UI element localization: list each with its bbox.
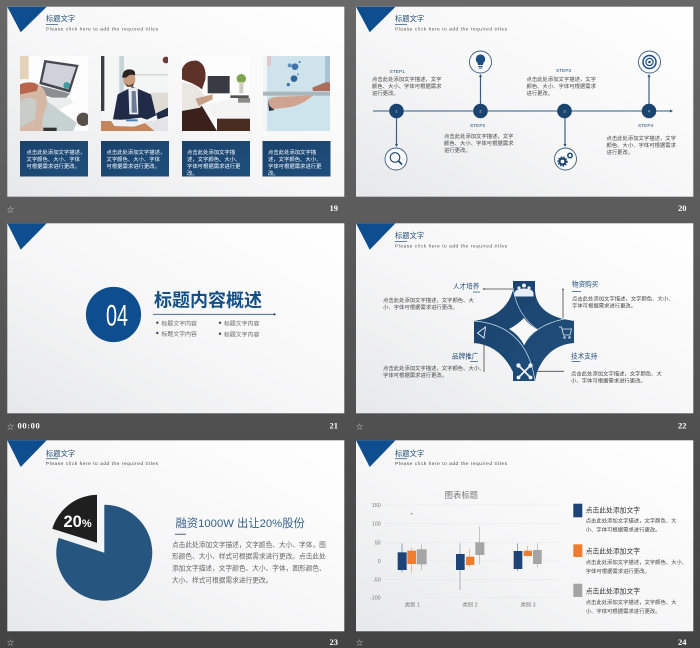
footer 21 [7, 420, 338, 431]
footer 23: ☆ [7, 638, 14, 647]
heading [395, 449, 508, 467]
caption box 2: 文字颜色、大小、字体 [106, 155, 161, 163]
heading: 标题文字 [395, 231, 424, 240]
caption box 3: 点击此处添加文字描 [187, 148, 236, 156]
label: talent [383, 282, 513, 311]
footer 23: 23 [330, 637, 338, 647]
photo: businessman [101, 56, 168, 131]
step 3 text: STEP3 [556, 68, 572, 74]
footer 21: 21 [330, 420, 338, 430]
y axis labels: 50 [375, 540, 381, 546]
icon: shopping cart [559, 327, 572, 338]
y axis labels [370, 503, 381, 602]
step 4 text: STEP4 [638, 123, 654, 129]
panel: slide 19 photos and captions [7, 7, 344, 214]
body paragraph: 形颜色、大小、样式可根据需求进行更改。点击此处 [172, 552, 326, 561]
caption box 4: 字体可根据需求进行更 [268, 162, 322, 170]
legend item blue [573, 504, 677, 534]
caption box 1: 点击此处添加文字描述， [26, 148, 85, 156]
x axis labels: 类别 2 [462, 601, 478, 609]
step 1 text: 颜色、大小、字体可根据需求 [372, 82, 442, 90]
pie label: 20% [64, 513, 92, 531]
heading [395, 14, 508, 32]
financing heading [175, 516, 305, 535]
corner triangle [356, 7, 396, 32]
whiskers [402, 527, 537, 590]
corner triangle [356, 223, 396, 250]
caption box 2 [101, 141, 169, 176]
caption box 4 [262, 141, 330, 177]
boxes category 1 [398, 513, 427, 570]
caption box 3: 字体可根据需求进行更 [187, 162, 241, 170]
corner triangle [356, 440, 396, 467]
heading: 标题文字 [46, 449, 75, 458]
label: brand: 点击此处添加文字描述，文字颜色、大小、 [383, 364, 485, 372]
boxes category 2 [456, 542, 484, 570]
icon: magnifier [385, 148, 407, 170]
step 1 text: 点击此处添加文字描述，文字 [372, 75, 441, 83]
icon: megaphone [478, 327, 486, 338]
bullet list: 标题文字内容 [224, 330, 259, 338]
label: purchasing [562, 280, 674, 318]
legend item gray: 小、字体可根据需求进行更改。 [586, 607, 661, 615]
caption box 2: 可根据需求进行更改。 [106, 162, 160, 170]
legend item gray: 点击此处添加文字 [586, 586, 640, 596]
footer 21: 00:00 [18, 420, 40, 430]
heading: 标题文字 [46, 14, 75, 23]
panel: slide 22 four-part diagram [356, 223, 693, 431]
label: purchasing: 点击此处添加文字描述，文字颜色、大小、 [572, 294, 674, 302]
caption box 1: 文字颜色、大小、字体 [26, 155, 81, 163]
panel: slide 23 pie chart [7, 440, 344, 647]
corner triangle [7, 7, 47, 32]
heading: Please click here to add the required titles [46, 26, 159, 32]
step 2 text: 颜色、大小、字体可根据需求 [444, 139, 514, 147]
step 3 text: 颜色、大小、字体可根据需求 [526, 82, 597, 90]
heading: Please click here to add the required titles [395, 244, 508, 250]
footer 20: 20 [678, 203, 686, 213]
step 4 text [606, 123, 677, 156]
footer 24: 24 [678, 637, 687, 647]
caption box 4: 改。 [268, 169, 279, 177]
footer 22: ☆ [356, 422, 363, 431]
x axis labels: 类别 1 [405, 601, 420, 609]
icon: target [638, 51, 660, 73]
body paragraph [172, 540, 326, 585]
step 2 text: 进行更改。 [444, 146, 471, 154]
bullet list: 标题文字内容 [162, 320, 197, 328]
caption box 3: 述，文字颜色、大小、 [187, 155, 240, 163]
financing heading: 融资1000W 出让20%股份 [176, 516, 305, 530]
panel: slide 20 step timeline [356, 7, 693, 213]
step 3 text: 进行更改。 [526, 89, 553, 97]
caption box 1: 可根据需求进行更改。 [26, 162, 80, 170]
footer 23 [7, 637, 338, 647]
step 4 text: 点击此处添加文字描述，文字 [606, 134, 676, 142]
heading [395, 231, 508, 250]
step 2 text: STEP2 [470, 123, 486, 129]
label: technical support: 点击此处添加文字描述，文字颜色、大 [571, 370, 662, 378]
caption box 3: 改。 [187, 169, 198, 177]
y axis labels: 150 [372, 503, 381, 509]
legend item orange: 点击此处添加文字 [586, 546, 640, 556]
x axis labels: 类别 3 [520, 601, 536, 609]
label: technical support: 小、字体可根据需求进行更改。 [571, 376, 646, 384]
bullet list: 标题文字内容 [224, 320, 259, 328]
heading: 标题文字 [395, 449, 424, 458]
label: brand: 品牌推广 [452, 352, 479, 360]
legend item gray: 点击此处添加文字描述，文字颜色、大 [586, 598, 677, 606]
footer 19 [7, 203, 338, 214]
caption box 2: 点击此处添加文字描述， [106, 148, 165, 156]
y axis labels: 0 [378, 559, 381, 565]
title rule with arrow [153, 313, 276, 315]
caption box 4: 述，文字颜色、大小、 [268, 155, 321, 163]
label: brand: 字体可根据需求进行更改。 [383, 371, 447, 379]
caption box 1 [20, 141, 88, 176]
pie slice 20 percent [52, 495, 97, 543]
legend item blue: 点击此处添加文字描述，文字颜色、大 [586, 516, 677, 524]
bullet list [156, 320, 259, 338]
heading: Please click here to add the required titles [46, 461, 159, 467]
body paragraph: 添加文字描述，文字颜色、大小、字体，图形颜色、 [172, 564, 326, 573]
label: talent: 点击此处添加文字描述，文字颜色、大 [383, 296, 474, 304]
body paragraph: 点击此处添加文字描述，文字颜色、大小、字体，图 [172, 540, 326, 549]
legend item blue: 小、字体可根据需求进行更改。 [586, 526, 661, 534]
step 2 text [444, 123, 514, 154]
step 4 text: 颜色、大小、字体可根据需求 [606, 141, 677, 149]
node numbers: 1 [395, 108, 398, 114]
icon: gears [554, 148, 576, 170]
node numbers [395, 108, 651, 114]
icon: light bulb [470, 51, 492, 73]
y axis labels: -50 [373, 577, 381, 583]
legend item gray [573, 584, 677, 615]
photo: woman at desk [182, 60, 250, 131]
footer 24 [356, 637, 687, 647]
footer 19: 19 [330, 203, 338, 213]
bullet list: 标题文字内容 [162, 330, 197, 338]
legend item orange [573, 544, 687, 575]
footer 22 [356, 420, 686, 431]
section number circle: 04 [106, 300, 128, 332]
x axis labels [405, 601, 536, 609]
boxes category 3 [514, 550, 542, 569]
heading [46, 14, 159, 32]
label: purchasing: 物资购买 [572, 280, 599, 288]
photo: laptop and hands [20, 56, 88, 131]
step 2 text: 点击此处添加文字描述，文字 [444, 132, 513, 140]
step nodes [389, 104, 656, 118]
heading: Please click here to add the required titles [395, 26, 508, 32]
heading [46, 449, 159, 467]
legend item blue: 点击此处添加文字 [586, 506, 640, 514]
photo: tablet with blue bubbles [263, 56, 330, 131]
footer 21: ☆ [7, 422, 14, 431]
panel: slide 24 box plot [356, 440, 693, 647]
panel: slide 21 section title [7, 223, 344, 431]
caption box 4: 点击此处添加文字描 [268, 148, 317, 156]
node numbers: 3 [563, 108, 566, 114]
label: talent: 人才培养 [453, 282, 480, 290]
section title: 标题内容概述 [154, 290, 262, 310]
heading: 标题文字 [395, 14, 424, 23]
step 3 text [526, 68, 597, 97]
label: brand [383, 344, 485, 379]
footer 22: 22 [678, 420, 686, 430]
caption box 3 [182, 141, 250, 177]
pie chart [52, 495, 152, 601]
legend item orange: 点击此处添加文字描述，文字颜色、大小、 [586, 558, 687, 566]
step 1 text: STEP1 [390, 69, 405, 75]
y axis labels: 100 [372, 522, 381, 528]
label: technical support: 技术支持 [571, 352, 598, 360]
section number circle [86, 287, 141, 342]
step 1 text: 进行更改。 [372, 89, 399, 97]
step 4 text: 进行更改。 [606, 148, 633, 156]
y axis labels: -100 [370, 596, 381, 602]
label: technical support [537, 352, 662, 384]
label: talent: 小、字体可根据需求进行更改。 [383, 303, 458, 311]
box plot chart [370, 490, 560, 609]
timeline axis [373, 110, 673, 112]
corner triangle [7, 223, 47, 250]
step 1 text [372, 69, 442, 97]
corner triangle [7, 440, 47, 467]
body paragraph: 大小、样式可根据需求进行更改。 [172, 576, 272, 585]
chart title: 图表标题 [445, 490, 479, 500]
label: purchasing: 字体可根据需求进行更改。 [572, 302, 636, 310]
footer 24: ☆ [356, 638, 363, 647]
footer 19: ☆ [7, 205, 14, 214]
step 3 text: 点击此处添加文字描述，文字 [526, 75, 596, 83]
node numbers: 2 [479, 108, 482, 114]
icon: tools [517, 364, 532, 378]
icon: team [514, 284, 534, 296]
node numbers: 4 [648, 108, 651, 114]
heading: Please click here to add the required titles [395, 461, 508, 467]
connector arrowheads [395, 74, 650, 147]
connector lines [396, 76, 649, 145]
interlocking arcs [474, 281, 574, 381]
legend item orange: 字体可根据需求进行更改。 [586, 567, 650, 575]
